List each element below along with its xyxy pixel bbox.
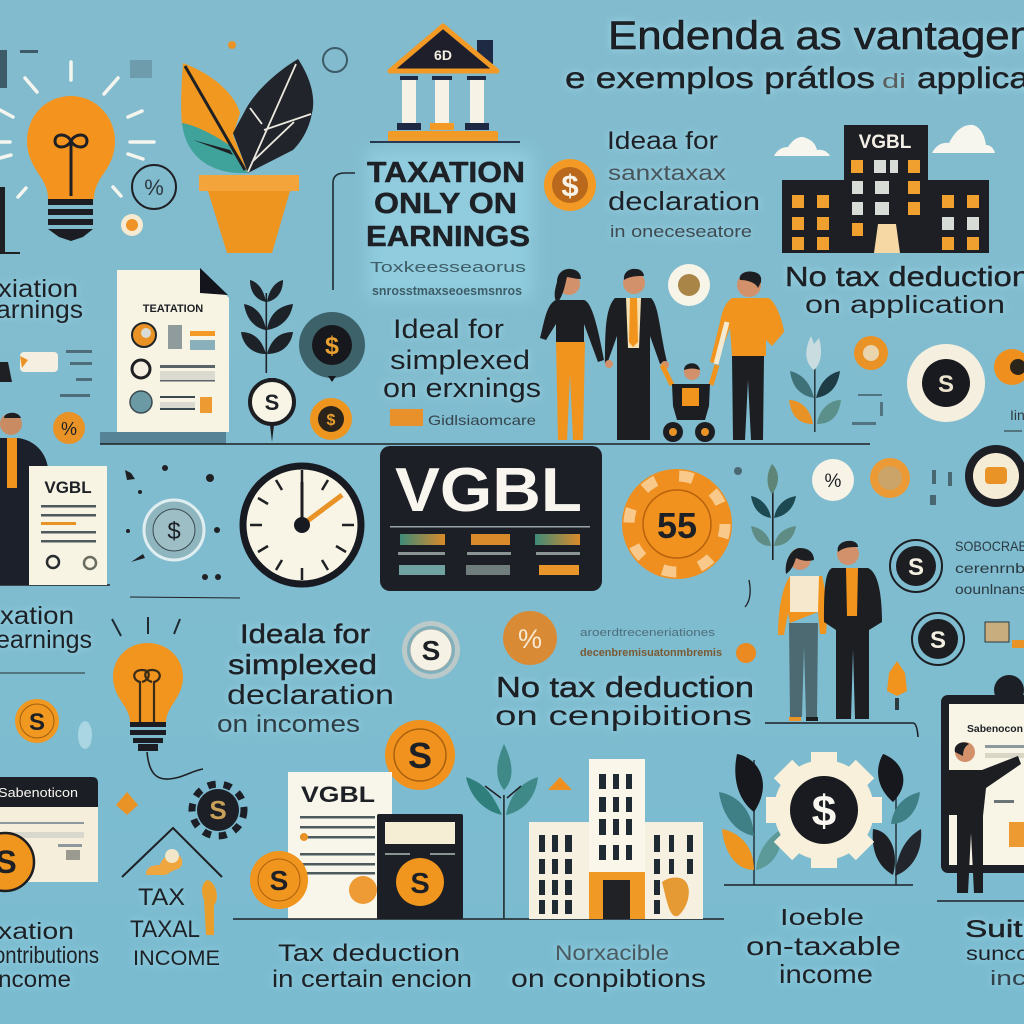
text block: taxation earnings left lower: xation	[0, 602, 74, 630]
text block: ideal for simplexed on earnings: on erxnings	[383, 373, 541, 403]
child on wheels	[662, 363, 717, 442]
icon: bracket line	[333, 173, 355, 290]
icon: coin left lower	[0, 672, 92, 749]
text block: tax taxa income: TAXAL	[130, 916, 200, 943]
icon: dollar medallion: S	[265, 390, 279, 415]
icon: glass coin with dots	[125, 465, 240, 598]
icon: dollar coin	[544, 159, 596, 211]
text block: suitable income edge: Suiti	[965, 916, 1024, 943]
text block: blurred sub-caption	[370, 259, 526, 298]
icon: family illustration	[540, 264, 784, 442]
text block: no tax deduction on application: No tax deduction	[785, 261, 1024, 292]
icon: dark gear seal and drop	[116, 784, 244, 836]
text block: ideala for simplexed declaration: Ideala for	[240, 619, 370, 649]
icon: percent coin: %	[518, 624, 542, 654]
icon: bank building: 6D	[434, 47, 452, 63]
caption: blurred line with coin	[580, 627, 756, 663]
text block: suitable income edge	[965, 916, 1024, 990]
icon: VGBL buildings	[774, 125, 995, 253]
icon: small orange coin	[854, 336, 888, 370]
icon: dark gear seal and drop: S	[209, 795, 227, 825]
icon: dark teal coin	[299, 312, 365, 382]
text block: tax deduction in certain: in certain encion	[272, 966, 472, 993]
text block: suitable income edge: suncc	[966, 944, 1024, 965]
text block: ideaa for sanxtax declaration: sanxtaxax	[608, 162, 727, 185]
icon: bulb lower left	[112, 617, 203, 779]
icon: dollar ring lower: S	[930, 627, 946, 654]
text block: no tax deduction on application	[785, 261, 1024, 319]
icon: dollar ring lower	[912, 613, 964, 665]
man	[824, 541, 882, 719]
icon: coin beside paper: S	[270, 865, 288, 896]
icon: bank building	[370, 26, 520, 143]
icon: couple	[778, 541, 882, 721]
text block: edge blurred caption: cerenrnb	[955, 560, 1024, 576]
text block: ideaa for sanxtax declaration: declaration	[608, 186, 760, 216]
icon: presenter at clipboard	[937, 675, 1024, 901]
icon: taxation document	[100, 268, 229, 444]
text block: nondeductible on contributions	[511, 942, 706, 993]
text block: ioeble on-taxable income: on-taxable	[746, 931, 901, 961]
icon: sprig middle right	[751, 464, 796, 560]
icon: scattered coins right	[734, 445, 1024, 507]
text block: no tax deduction on contributions: on cenpibitions	[495, 700, 752, 731]
text block: ideala for simplexed declaration: on incomes	[217, 711, 360, 738]
icon: dark teal coin: $	[325, 332, 339, 360]
woman	[540, 269, 604, 440]
icon: left clutter: %	[61, 419, 77, 439]
text block: ioeble on-taxable income: income	[779, 959, 873, 989]
text block: nondeductible on contributions: on conpibtions	[511, 965, 706, 993]
panel: VGBL card	[380, 446, 602, 591]
icon: VGBL buildings: VGBL	[859, 132, 912, 153]
icon: leaf plant right	[789, 336, 841, 432]
caption: blurred line with coin: aroerdtreceneriationes	[580, 627, 716, 639]
icon: orange 55 chip: 55	[657, 505, 697, 546]
divider: couple baseline	[765, 723, 918, 737]
title: Endenda as vantagen	[608, 14, 1024, 58]
icon: cream ring dollar	[907, 344, 985, 422]
heading: taxation only on earnings: EARNINGS	[366, 221, 530, 253]
icon: silver dollar coin	[402, 621, 460, 679]
text block: edge blurred caption	[955, 538, 1024, 597]
icon: percent coin	[503, 611, 557, 665]
caption: blurred line with coin: decenbremisuatonmbremis	[580, 647, 722, 659]
icon: orange coin: $	[327, 412, 336, 429]
divider: lower baseline	[233, 918, 724, 920]
icon: gear dollar and plants: $	[812, 787, 836, 836]
title: di	[882, 71, 906, 93]
text block: tax deduction in certain: Tax deduction	[278, 940, 460, 967]
icon: small orange figure and tan clutter	[745, 580, 1024, 710]
icon: VGBL paper: VGBL	[44, 478, 92, 497]
text block: ideal for simplexed on earnings: simplexed	[390, 345, 530, 375]
text block: ideal for simplexed on earnings	[383, 314, 541, 403]
text block: taxation contributions income left: ncome	[0, 966, 71, 992]
heading: taxation only on earnings: TAXATION	[367, 157, 525, 189]
icon: coin left lower: S	[29, 709, 45, 736]
text block: suitable income edge: inc	[990, 968, 1024, 990]
text block: ideaa for sanxtax declaration: in oneceseatore	[610, 222, 752, 241]
icon: orange coin center-low: S	[408, 735, 432, 776]
caption: small label with tag	[390, 409, 536, 428]
icon: gear dollar and plants	[719, 752, 921, 885]
icon: potted plant	[181, 59, 313, 253]
text block: ideala for simplexed declaration: simplexed	[228, 649, 377, 680]
text block: ideaa for sanxtax declaration: Ideaa for	[607, 127, 718, 155]
title: e exemplos prátlos	[565, 62, 875, 95]
icon: businessman left	[0, 413, 110, 585]
icon: dollar coin: $	[561, 168, 579, 203]
man in orange shirt	[710, 271, 784, 440]
icon: VGBL paper and calculator: S	[410, 868, 430, 900]
icon: light bulb top left	[0, 62, 154, 241]
icon: dollar ring	[890, 540, 942, 592]
icon: dollar ring: S	[908, 554, 924, 581]
icon: tax house roof	[122, 828, 222, 935]
text block: ideal for simplexed on earnings: Ideal for	[393, 314, 504, 344]
icon: coin beside paper	[250, 851, 308, 909]
divider: upper baseline	[100, 443, 870, 445]
icon: clock	[243, 466, 361, 584]
icon: presenter at clipboard: Sabenocon	[967, 724, 1023, 735]
icon: orange coin	[310, 398, 352, 440]
icon: left edge bar and clutter	[0, 41, 347, 254]
icon: dollar medallion	[250, 378, 294, 442]
man with tie	[605, 269, 669, 440]
panel: left banner card	[0, 777, 98, 891]
text block: ideala for simplexed declaration: declaration	[227, 679, 394, 710]
icon: orange coin center-low	[385, 720, 455, 790]
heading: taxation only on earnings	[366, 157, 530, 253]
caption: small label with tag: Gidlsiaomcare	[428, 412, 536, 428]
icon: scattered coins right: %	[825, 471, 842, 492]
text block: ideala for simplexed declaration	[217, 619, 394, 738]
text block: no tax deduction on contributions	[495, 672, 754, 731]
text block: edge blurred caption: oounlnans	[955, 581, 1024, 597]
text block: tax taxa income: INCOME	[133, 947, 220, 970]
icon: orange 55 chip	[622, 469, 732, 579]
icon: edge coin with clutter	[852, 349, 1024, 432]
text block: taxation earnings left	[0, 275, 83, 324]
text block: tax deduction in certain	[272, 940, 472, 993]
icon: VGBL paper and calculator: VGBL	[301, 782, 375, 807]
title: applica	[917, 62, 1024, 95]
icon: plant center	[466, 744, 538, 919]
icon: percent circle and small coin: %	[144, 175, 164, 200]
text block: ioeble on-taxable income	[746, 904, 901, 989]
text block: ideaa for sanxtax declaration	[607, 127, 760, 241]
text block: blurred sub-caption: Toxkeesseaorus	[370, 259, 526, 276]
text block: taxation contributions income left	[0, 918, 99, 992]
text block: blurred sub-caption: snrosstmaxseoesmsnros	[372, 283, 522, 298]
panel: taxation halo	[368, 150, 532, 298]
text block: taxation earnings left lower	[0, 602, 92, 654]
icon: glass coin with dots: $	[167, 518, 181, 545]
text block: tax taxa income: TAX	[138, 884, 185, 911]
icon: silver dollar coin: S	[422, 635, 440, 666]
icon: cream ring dollar: S	[938, 371, 954, 398]
icon: VGBL paper and calculator	[288, 772, 463, 919]
icon: taxation document: TEATATION	[143, 303, 203, 315]
icon: sprig	[241, 280, 293, 373]
text block: tax taxa income	[130, 884, 220, 970]
text block: no tax deduction on application: on application	[805, 291, 1005, 319]
panel: VGBL card: VGBL	[395, 456, 582, 525]
text block: nondeductible on contributions: Norxacible	[555, 942, 669, 965]
text block: taxation earnings left: xiation	[0, 275, 78, 303]
icon: VGBL paper	[29, 466, 107, 585]
icon: orange triangle	[548, 777, 572, 790]
icon: office tower	[529, 759, 703, 919]
icon: percent circle and small coin	[121, 165, 176, 236]
icon: round medallion	[668, 264, 710, 306]
icon: left clutter	[0, 350, 92, 444]
panel: left banner card: Sabenoticon	[0, 785, 78, 800]
heading: taxation only on earnings: ONLY ON	[374, 188, 517, 220]
title	[565, 14, 1024, 95]
woman	[778, 548, 827, 721]
text block: no tax deduction on contributions: No tax deduction	[496, 672, 754, 704]
text block: ioeble on-taxable income: Ioeble	[780, 904, 864, 930]
